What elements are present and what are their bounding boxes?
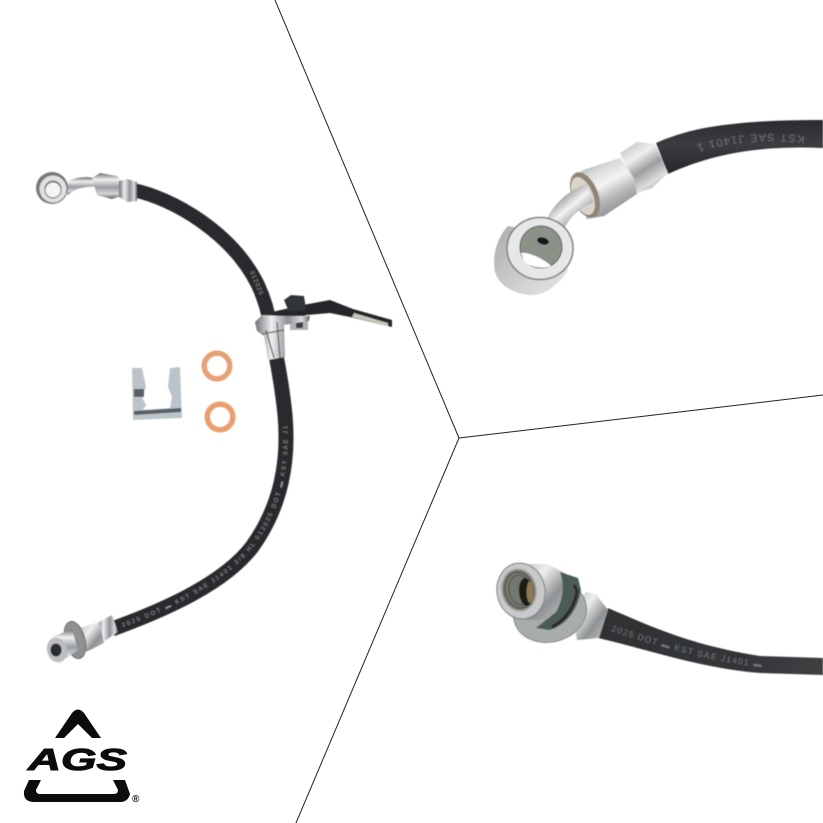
- internal threads: [499, 566, 539, 614]
- divider lines: [275, 0, 823, 823]
- gasket band: [552, 585, 577, 627]
- crimp collar: [620, 142, 668, 193]
- banjo bore: [520, 226, 562, 268]
- clip shadow details: [134, 389, 181, 415]
- close-up hose: [598, 608, 823, 675]
- close-up hose: [656, 120, 823, 174]
- metal retaining clip: [132, 367, 182, 420]
- threaded body: [515, 564, 567, 620]
- front ring: [493, 559, 549, 623]
- close-up hose print: KST SAE J1401 1: [697, 133, 804, 152]
- logo: AGS: [24, 710, 140, 805]
- bent tube: [552, 193, 590, 232]
- hose clamp sleeve: [255, 315, 310, 360]
- bore oil hole: [536, 236, 550, 246]
- logo bottom tray: [24, 780, 130, 802]
- bore shadow: [518, 577, 534, 607]
- bolt end fitting, bottom left: [44, 615, 118, 665]
- close-up hose print: 2025 DOT ▬ KST SAE J1401 ▬ 3/8: [611, 625, 762, 668]
- upper hose print: 012025: [248, 270, 264, 297]
- banjo barrel: [494, 226, 568, 295]
- bracket tip highlight: [352, 313, 388, 326]
- full brake hose assembly: [35, 171, 393, 663]
- banjo fitting, top left: [36, 172, 137, 204]
- thread rings: [502, 570, 536, 610]
- crimp collar: [572, 592, 608, 640]
- mounting bracket arm: [272, 300, 392, 327]
- dark gasket: [536, 572, 581, 630]
- hose print: 2025 DOT ▬ KST SAE J1401 3/8 HL 012025 DOT ▬ KST SAE J1: [121, 426, 288, 628]
- registered mark: ®: [132, 794, 140, 805]
- socket body: [570, 158, 637, 219]
- logo top chevron: [55, 710, 101, 738]
- rubber hose, lower section: [112, 350, 286, 629]
- banjo ring: [507, 218, 573, 280]
- rubber hose, upper section: [133, 190, 270, 325]
- bore inner: [526, 581, 534, 603]
- copper washer, lower: [207, 404, 233, 430]
- detail: banjo fitting close-up: [494, 119, 823, 296]
- socket opening: [564, 168, 606, 222]
- flange washer: [506, 573, 594, 651]
- socket face: [566, 174, 600, 218]
- bracket bolt: [284, 295, 308, 330]
- copper washer, upper: [204, 353, 230, 379]
- logo wordmark: AGS: [27, 742, 127, 777]
- bore lower light: [521, 253, 551, 268]
